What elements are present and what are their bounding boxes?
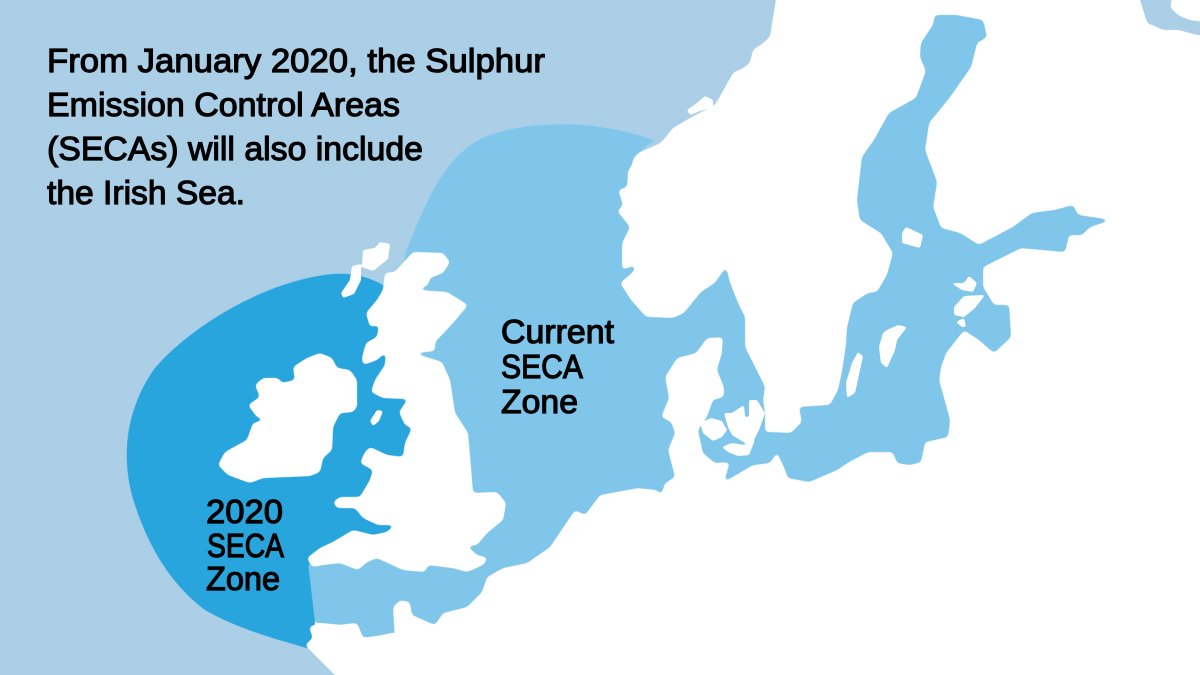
label: 2020 SECA zone: SECA [207, 527, 284, 564]
small islands [341, 96, 985, 456]
mainland Europe land mass [310, 0, 1200, 675]
label: current SECA zone: Current [501, 313, 614, 350]
Great Britain [307, 252, 506, 572]
current SECA zone [308, 15, 1111, 643]
title text: From January 2020, the Sulphur [47, 42, 545, 79]
title text: Emission Control Areas [47, 86, 400, 123]
Ireland [218, 353, 357, 483]
label: current SECA zone: Zone [501, 383, 578, 420]
2020 SECA zone [127, 274, 420, 649]
northern land wedge top right [1170, 0, 1200, 24]
title text: the Irish Sea. [47, 174, 245, 211]
label: 2020 SECA zone: 2020 [206, 493, 283, 530]
label: current SECA zone [501, 313, 614, 420]
label: 2020 SECA zone: Zone [206, 560, 280, 597]
label: 2020 SECA zone [206, 493, 284, 597]
Brittany peninsula [305, 623, 400, 675]
title text [47, 42, 545, 211]
title text: (SECAs) will also include [47, 130, 423, 167]
label: current SECA zone: SECA [501, 348, 583, 385]
